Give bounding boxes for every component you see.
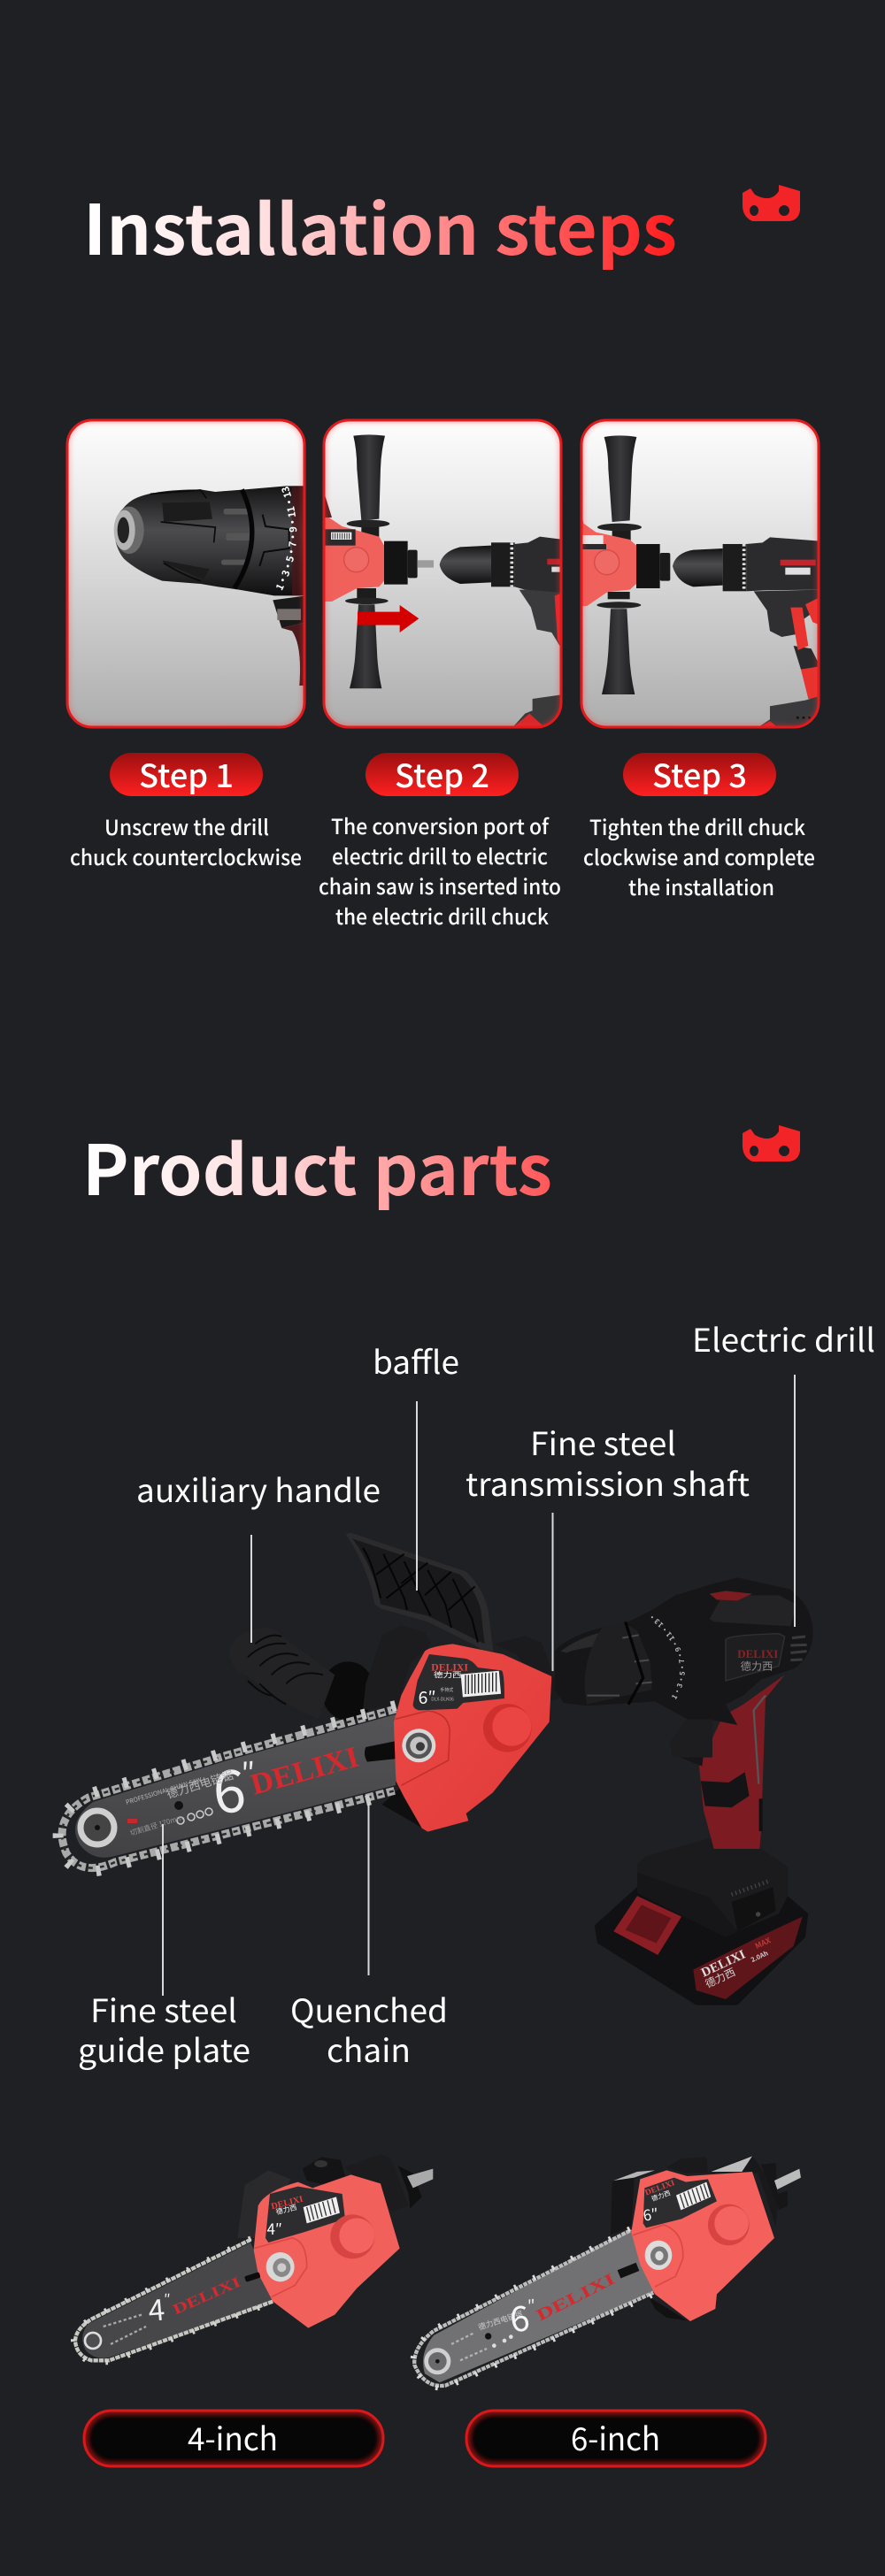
leader line: electric drill <box>794 1375 796 1627</box>
step 1 badge <box>110 751 263 797</box>
drill chuck close-up <box>113 486 303 686</box>
red saw body: DLX-DLK06 <box>431 1697 454 1703</box>
product diagram: saw rear parts <box>229 1533 559 1829</box>
step 3 description: clockwise and complete <box>583 840 815 871</box>
drill chuck close-up: 1·3·5·7·9·11·13 <box>276 487 297 591</box>
step 3 badge <box>623 751 776 797</box>
drill head: 德力西 <box>741 1659 773 1673</box>
label: quenched chain: Quenched <box>290 1986 448 2032</box>
label: fine steel guide plate <box>78 1986 250 2072</box>
label: auxiliary handle: auxiliary handle <box>136 1466 381 1512</box>
guide bar with chain: DELIXI <box>247 1741 363 1802</box>
step 2 description: The conversion port of <box>331 809 550 840</box>
product: 4-inch saw: 德力西 <box>275 2203 298 2217</box>
product: 6-inch saw: 德力西 <box>650 2188 672 2204</box>
step 2 badge <box>366 751 519 797</box>
red saw body: 手持式 <box>440 1687 453 1693</box>
chain <box>62 1709 396 1868</box>
step 2 description <box>319 809 561 931</box>
saw adapter and drill apart <box>325 434 564 728</box>
label: fine steel transmission shaft: Fine steel <box>530 1419 676 1465</box>
step 3 description: the installation <box>628 870 774 901</box>
product: 4-inch saw: 4 <box>146 2286 166 2330</box>
icon: chain link <box>743 1125 800 1162</box>
panel: step 2 photo <box>324 420 564 728</box>
step 2 badge: Step 2 <box>395 751 489 797</box>
drill grip <box>699 1675 785 1849</box>
guide bar with chain <box>58 1706 396 1871</box>
step 2 description: chain saw is inserted into <box>319 870 561 901</box>
product: 6-inch saw: 6″ <box>642 2202 659 2226</box>
label: quenched chain: chain <box>327 2026 411 2072</box>
product: 6-inch saw: ″ <box>526 2293 537 2318</box>
battery: 2.0Ah <box>750 1948 770 1965</box>
black housing <box>363 1625 431 1710</box>
guide bar with chain: 德力西电链锯 <box>165 1766 235 1802</box>
icon: chain link <box>743 185 800 221</box>
step 1 badge: Step 1 <box>139 751 234 797</box>
title: product parts: Product parts <box>82 1116 552 1215</box>
step 3 description: Tighten the drill chuck <box>589 810 805 841</box>
step 2 description: the electric drill chuck <box>335 900 549 931</box>
guide bar with chain: 切割直径 170mm <box>129 1813 184 1838</box>
leader line: baffle <box>416 1401 418 1591</box>
step 3 badge: Step 3 <box>652 751 747 797</box>
red saw body: DELIXI <box>431 1663 469 1674</box>
battery: 德力西 <box>703 1964 738 1991</box>
label: electric drill: Electric drill <box>692 1315 875 1361</box>
leader line: guide plate <box>162 1824 164 1996</box>
electric drill with battery <box>554 1578 812 2005</box>
step 3 description <box>583 810 815 901</box>
step 1 description: chuck counterclockwise <box>70 840 302 871</box>
battery <box>595 1838 808 2005</box>
auxiliary handle <box>229 1628 374 1721</box>
red saw body: 德力西 <box>434 1670 462 1680</box>
label: quenched chain <box>290 1986 448 2072</box>
product: 4-inch saw: DELIXI <box>270 2195 304 2212</box>
battery: MAX <box>753 1935 773 1951</box>
label: fine steel transmission shaft <box>466 1419 750 1506</box>
product: 6-inch saw <box>412 2156 801 2388</box>
badge: 4-inch: 4-inch <box>188 2414 278 2460</box>
saw adapter joined to drill <box>581 435 820 728</box>
badge: 6-inch <box>466 2411 766 2466</box>
label: fine steel guide plate: Fine steel <box>90 1986 237 2032</box>
red saw body: 6″ <box>419 1684 436 1709</box>
panel: step 1 photo <box>65 419 306 729</box>
drill head: DELIXI <box>737 1648 778 1660</box>
label: fine steel transmission shaft: transmission shaft <box>466 1460 750 1506</box>
guide bar with chain: PROFESSIONAL CHAIN SAW <box>125 1775 203 1807</box>
guide bar with chain: ″ <box>240 1750 258 1794</box>
arrow <box>358 605 419 632</box>
product: 4-inch saw: 4″ <box>267 2218 282 2239</box>
label: fine steel guide plate: guide plate <box>78 2026 250 2072</box>
product: 4-inch saw <box>73 2154 433 2363</box>
drill head <box>554 1578 812 1767</box>
label: baffle: baffle <box>373 1338 459 1384</box>
leader line: quenched chain <box>368 1804 370 1975</box>
red saw body <box>365 1644 551 1832</box>
product: 6-inch saw: 德力西电链锯 <box>477 2308 524 2333</box>
badge: 6-inch: 6-inch <box>571 2414 660 2460</box>
drill head: 1·3·5·7·9·11·13· <box>651 1616 685 1699</box>
product: 6-inch saw: DELIXI <box>534 2270 618 2325</box>
guide bar with chain: 6 <box>209 1744 249 1831</box>
product: 6-inch saw: 6 <box>506 2290 533 2343</box>
product: 6-inch saw: DELIXI <box>644 2179 676 2197</box>
leader line: transmission shaft <box>552 1513 554 1671</box>
badge: 4-inch <box>84 2411 383 2466</box>
step 2 description: electric drill to electric <box>332 840 548 870</box>
title: installation steps: Installation steps <box>83 176 677 275</box>
product: 4-inch saw: DELIXI <box>170 2273 243 2318</box>
battery: DELIXI <box>699 1947 748 1981</box>
step 1 description: Unscrew the drill <box>104 810 269 841</box>
baffle <box>346 1533 493 1652</box>
product: 4-inch saw: ″ <box>164 2288 171 2309</box>
step 1 description <box>70 810 302 871</box>
leader line: auxiliary handle <box>250 1535 252 1643</box>
panel: step 3 photo <box>581 420 820 728</box>
